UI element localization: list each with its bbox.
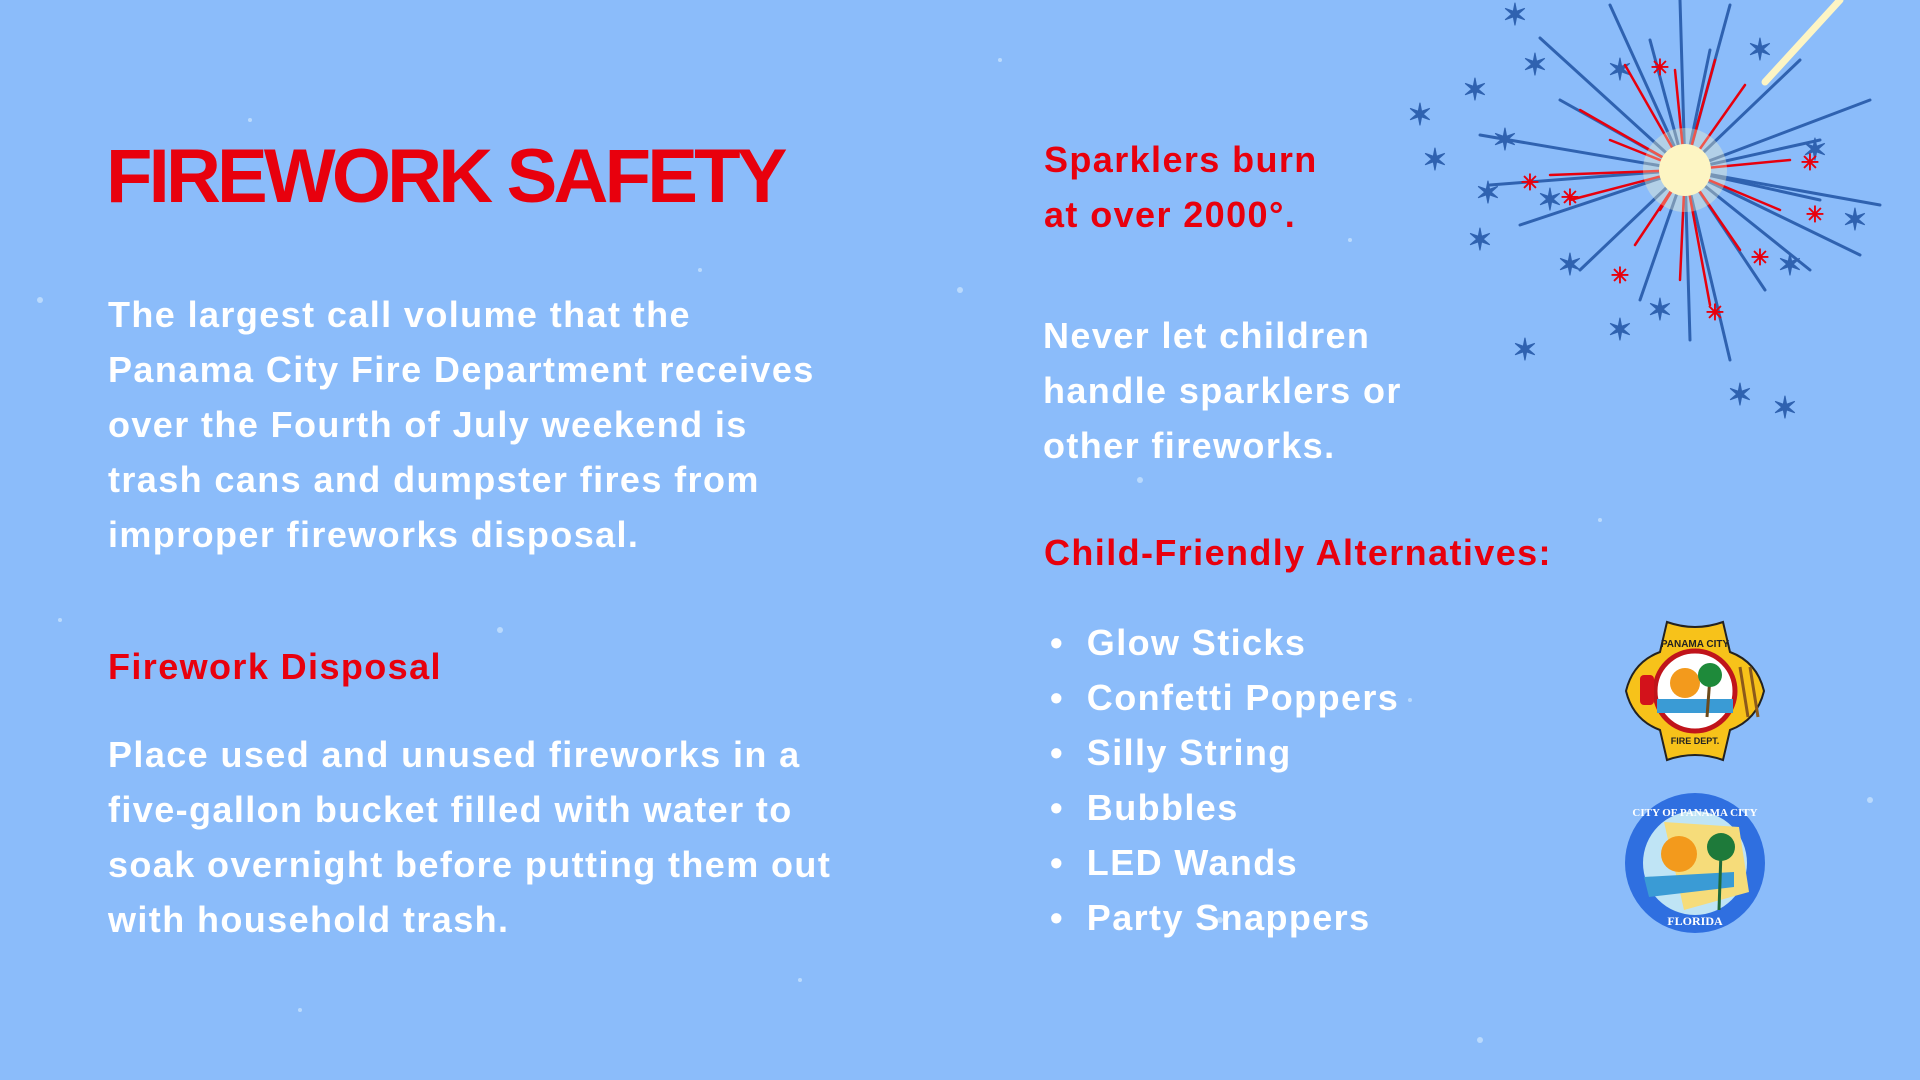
icon: city of panama city seal: FLORIDA (1667, 914, 1723, 928)
icon: city of panama city seal (1625, 793, 1765, 933)
list: alternatives (1050, 622, 1399, 938)
text block: children warning (1043, 315, 1402, 466)
list: alternatives: • LED Wands (1050, 842, 1298, 883)
icon: sparkler burst: ✳ (1561, 185, 1579, 210)
icon: sparkler burst: ✶ (1607, 314, 1633, 347)
heading: firework disposal: Firework Disposal (108, 646, 442, 687)
icon: sparkler burst: ✶ (1467, 224, 1493, 257)
text block: disposal: Place used and unused fireworks in a (108, 734, 801, 775)
icon: sparkler burst: ✶ (1647, 294, 1673, 327)
icon: sparkler burst: ✳ (1611, 263, 1629, 288)
list: alternatives: • Silly String (1050, 732, 1292, 773)
icon: sparkler burst: ✶ (1777, 249, 1803, 282)
icon: sparkler burst: ✶ (1475, 177, 1501, 210)
list: alternatives: • Confetti Poppers (1050, 677, 1399, 718)
icon: city of panama city seal: CITY OF PANAMA CITY (1632, 807, 1758, 819)
icon: fire department logo (1625, 620, 1765, 762)
icon: sparkler burst: ✶ (1522, 49, 1548, 82)
icon: sparkler burst: ✶ (1462, 74, 1488, 107)
text block: call volume: Panama City Fire Department receives (108, 349, 815, 390)
icon: sparkler burst: ✳ (1521, 170, 1539, 195)
icon: sparkler burst: ✳ (1751, 245, 1769, 270)
list: alternatives: • Bubbles (1050, 787, 1239, 828)
icon: fire department logo: PANAMA CITY (1661, 639, 1729, 650)
text block: call volume: improper fireworks disposal. (108, 514, 639, 555)
text block: call volume: trash cans and dumpster fires from (108, 459, 760, 500)
callout: sparklers temperature: Sparklers burn (1044, 139, 1318, 180)
text block: call volume: over the Fourth of July weekend is (108, 404, 748, 445)
icon: sparkler burst: ✶ (1537, 184, 1563, 217)
icon: sparkler burst: ✶ (1422, 144, 1448, 177)
icon: sparkler burst: ✶ (1407, 99, 1433, 132)
icon: sparkler burst: ✶ (1727, 379, 1753, 412)
icon: fire department logo: FIRE DEPT. (1671, 736, 1719, 746)
text block: call volume: The largest call volume that the (108, 294, 691, 335)
text block: children warning: handle sparklers or (1043, 370, 1402, 411)
icon: sparkler burst: ✶ (1512, 334, 1538, 367)
icon: sparkler burst: ✳ (1651, 55, 1669, 80)
heading: child-friendly alternatives: Child-Friendly Alternatives: (1044, 532, 1552, 573)
icon: sparkler burst: ✶ (1492, 124, 1518, 157)
text block: call volume (108, 294, 815, 555)
icon: sparkler burst: ✳ (1801, 150, 1819, 175)
icon: sparkler burst: ✶ (1747, 34, 1773, 67)
icon: sparkler burst: ✶ (1802, 134, 1828, 167)
text block: disposal: soak overnight before putting them out (108, 844, 831, 885)
icon: sparkler burst: ✶ (1842, 204, 1868, 237)
text block: children warning: other fireworks. (1043, 425, 1335, 466)
icon: sparkler burst: ✶ (1607, 54, 1633, 87)
title: FIREWORK SAFETY (106, 134, 784, 219)
callout: sparklers temperature: at over 2000°. (1044, 194, 1296, 235)
text block: disposal: five-gallon bucket filled with water to (108, 789, 793, 830)
text block: disposal (108, 734, 831, 940)
text block: disposal: with household trash. (108, 899, 509, 940)
list: alternatives: • Party Snappers (1050, 897, 1371, 938)
icon: sparkler burst: ✳ (1806, 202, 1824, 227)
icon: sparkler burst: ✶ (1557, 249, 1583, 282)
list: alternatives: • Glow Sticks (1050, 622, 1306, 663)
icon: sparkler burst: ✳ (1706, 300, 1724, 325)
icon: sparkler burst (1407, 0, 1882, 420)
callout: sparklers temperature (1044, 139, 1318, 235)
sparkler stick (1765, 0, 1840, 82)
text block: children warning: Never let children (1043, 315, 1370, 356)
